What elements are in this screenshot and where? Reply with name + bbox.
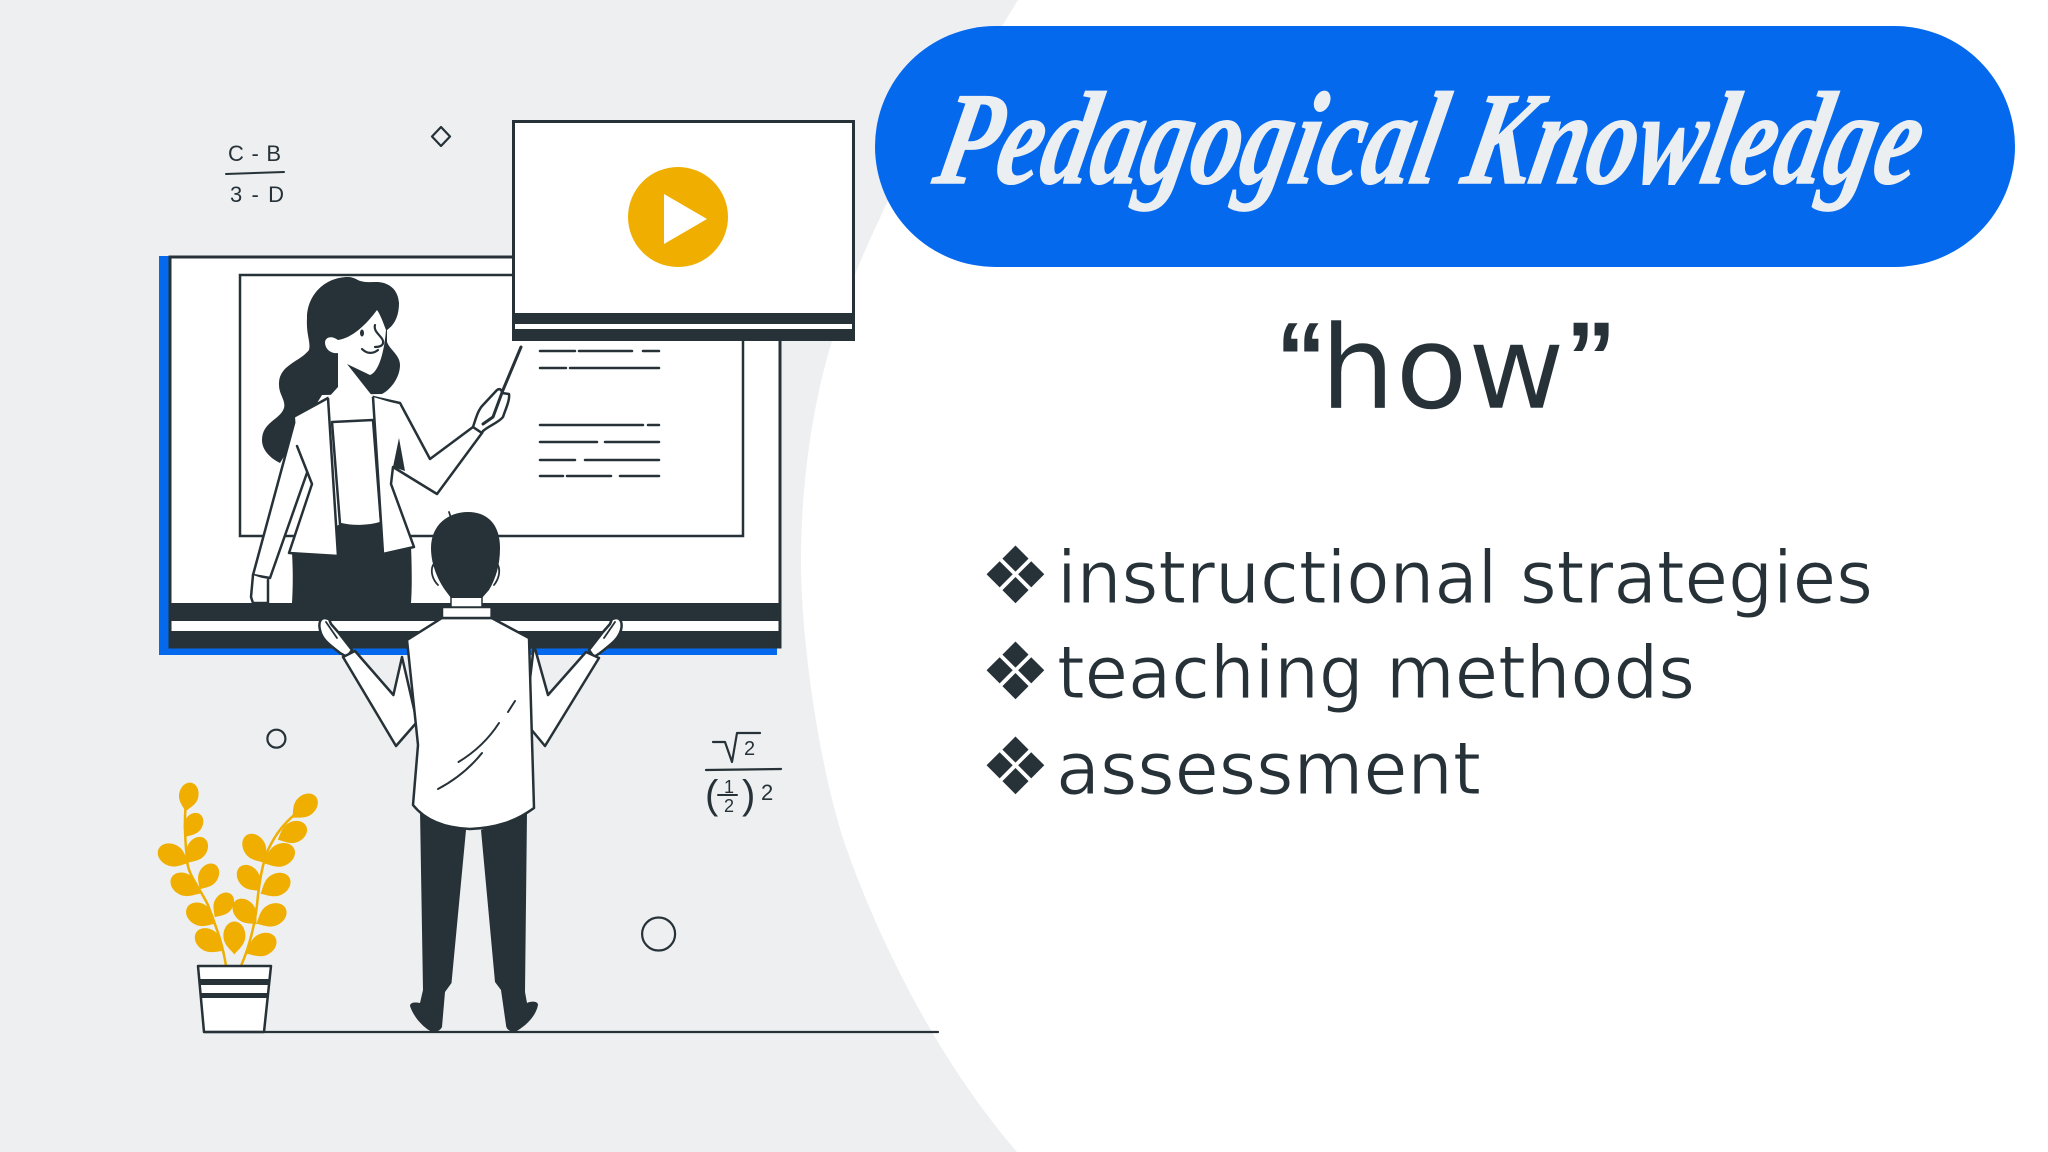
bullet item: assessment: ❖ <box>980 721 1051 813</box>
icon: play button <box>628 167 728 267</box>
icon: small diamond <box>432 127 450 146</box>
man seen from behind <box>319 512 622 1032</box>
striped pot <box>198 966 271 1032</box>
title pill <box>875 26 2015 267</box>
math note: square root fraction: ( <box>705 773 719 817</box>
video screen card <box>512 122 855 341</box>
whiteboard text lines <box>540 351 659 476</box>
bullet list <box>980 530 1873 813</box>
math note: small circle <box>267 730 285 748</box>
plant leaves <box>154 781 323 963</box>
classroom board illustration <box>159 256 781 655</box>
plant stems <box>185 803 305 966</box>
right arm raised <box>373 397 482 494</box>
jacket left panel <box>289 398 338 556</box>
inner whiteboard <box>240 275 743 536</box>
ground line <box>204 1031 938 1033</box>
quoted word how: ” <box>1566 302 1616 414</box>
bullet item: instructional strategies: ❖ <box>980 530 1051 622</box>
face and neck <box>325 310 386 398</box>
math note: fraction C-B over 3-D: 3 - D <box>230 182 284 207</box>
pointer and hand <box>473 347 521 433</box>
hair <box>262 277 400 463</box>
trousers and shoes <box>410 810 538 1032</box>
right sleeve and hand <box>525 618 622 746</box>
plant in striped pot <box>154 781 323 1032</box>
left sleeve and hand <box>319 618 417 746</box>
outer frame <box>170 257 780 647</box>
shirt <box>407 618 534 829</box>
bullet item: assessment: assessment <box>1056 727 1481 812</box>
math note: square root fraction: 2 <box>761 780 773 805</box>
math note: square root fraction: 2 <box>724 796 734 816</box>
math note: fraction C-B over 3-D: C - B <box>228 141 281 166</box>
teacher figure <box>251 277 521 603</box>
frame dark ledge <box>169 603 781 648</box>
quoted word how: “ <box>1276 302 1326 414</box>
skirt <box>292 522 412 603</box>
neck <box>451 596 482 607</box>
math note: square root fraction: 1 <box>724 777 734 797</box>
math note: square root fraction: ) <box>742 773 755 817</box>
math note: square root fraction: 2 <box>744 738 755 760</box>
math note: square root fraction <box>705 733 781 817</box>
blue shadow of frame <box>159 256 777 655</box>
bullet item: teaching methods: ❖ <box>980 626 1051 718</box>
grey background panel with curved edge <box>0 0 1018 1152</box>
facial features <box>360 325 383 353</box>
jacket right panel <box>373 397 414 554</box>
shirt top <box>332 420 381 526</box>
collar <box>442 607 492 618</box>
shirt wrinkles <box>438 701 515 789</box>
bullet item: teaching methods: teaching methods <box>1057 631 1695 716</box>
bullet item: instructional strategies: instructional strategies <box>1057 536 1873 621</box>
head <box>431 512 500 598</box>
math note: fraction C-B over 3-D <box>226 141 284 207</box>
left sleeve and hand <box>253 416 325 578</box>
math note: large circle <box>642 918 675 950</box>
quoted word how: how <box>1320 301 1565 436</box>
